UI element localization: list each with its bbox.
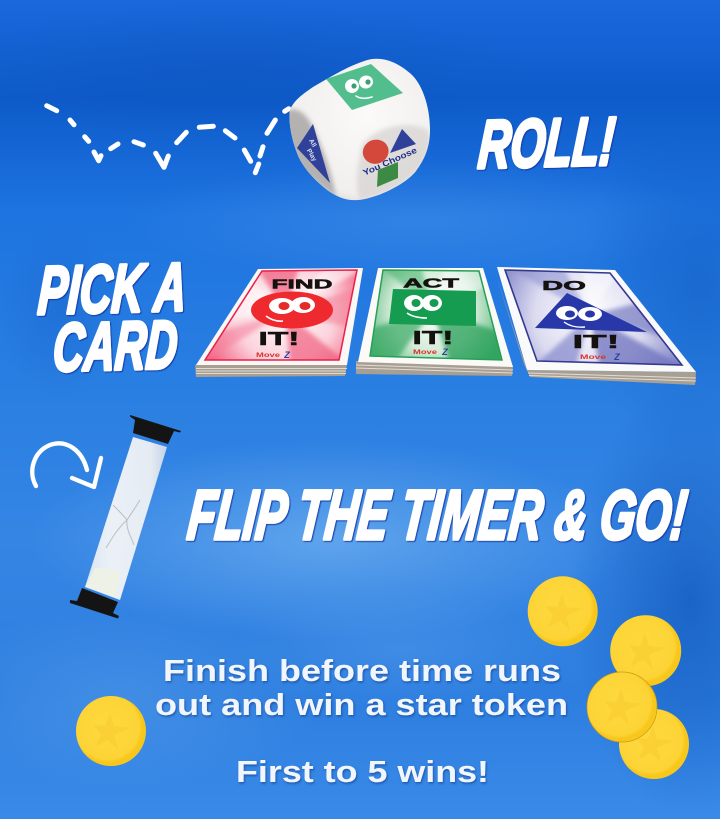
die face shading [284, 109, 430, 200]
coin [528, 576, 598, 646]
card: act it: Move [413, 350, 438, 356]
card: do it: IT! [572, 332, 620, 352]
heading: pick a card: PICK A [36, 249, 189, 329]
curved flip arrow [32, 443, 101, 487]
die green square face [326, 64, 403, 110]
body text: Finish before time runs [163, 653, 561, 688]
card: find it: Z [283, 350, 290, 360]
card: act it: ACT [403, 276, 459, 290]
die blue triangle [297, 124, 330, 183]
green rectangle face [389, 289, 476, 326]
coin [619, 709, 689, 779]
die blue triangle: All [307, 138, 318, 149]
body text: out and win a star token [155, 687, 568, 722]
blue triangle face [535, 293, 647, 332]
card: act it [356, 262, 513, 376]
card: find it: FIND [272, 278, 332, 292]
timer top cap [130, 415, 181, 444]
die blue triangle: Play [305, 148, 318, 163]
card: do it: DO [542, 278, 586, 293]
card: do it: Z [613, 352, 620, 362]
die you choose face [359, 129, 419, 187]
heading: pick a card: CARD [51, 307, 180, 386]
card: act it: Z [441, 347, 448, 357]
die [284, 59, 430, 200]
star token coins [76, 576, 689, 779]
card: find it: Move [256, 353, 281, 359]
card: find it [190, 262, 365, 377]
timer sand [85, 568, 120, 597]
body text [155, 653, 568, 789]
heading: roll: ROLL! [476, 103, 618, 183]
card: do it [495, 262, 696, 385]
heading: pick a card [36, 249, 189, 386]
coin [587, 672, 657, 742]
coin [76, 696, 146, 766]
die you choose face: You Choose [361, 145, 419, 178]
card: find it: IT! [258, 329, 300, 349]
red circle face [251, 292, 333, 328]
timer bottom cap [70, 588, 119, 618]
dashed bounce path [47, 106, 289, 173]
coin [610, 615, 681, 686]
body text: First to 5 wins! [236, 754, 489, 789]
sand timer [70, 415, 181, 618]
card: do it: Move [580, 355, 607, 361]
card: act it: IT! [412, 328, 454, 348]
